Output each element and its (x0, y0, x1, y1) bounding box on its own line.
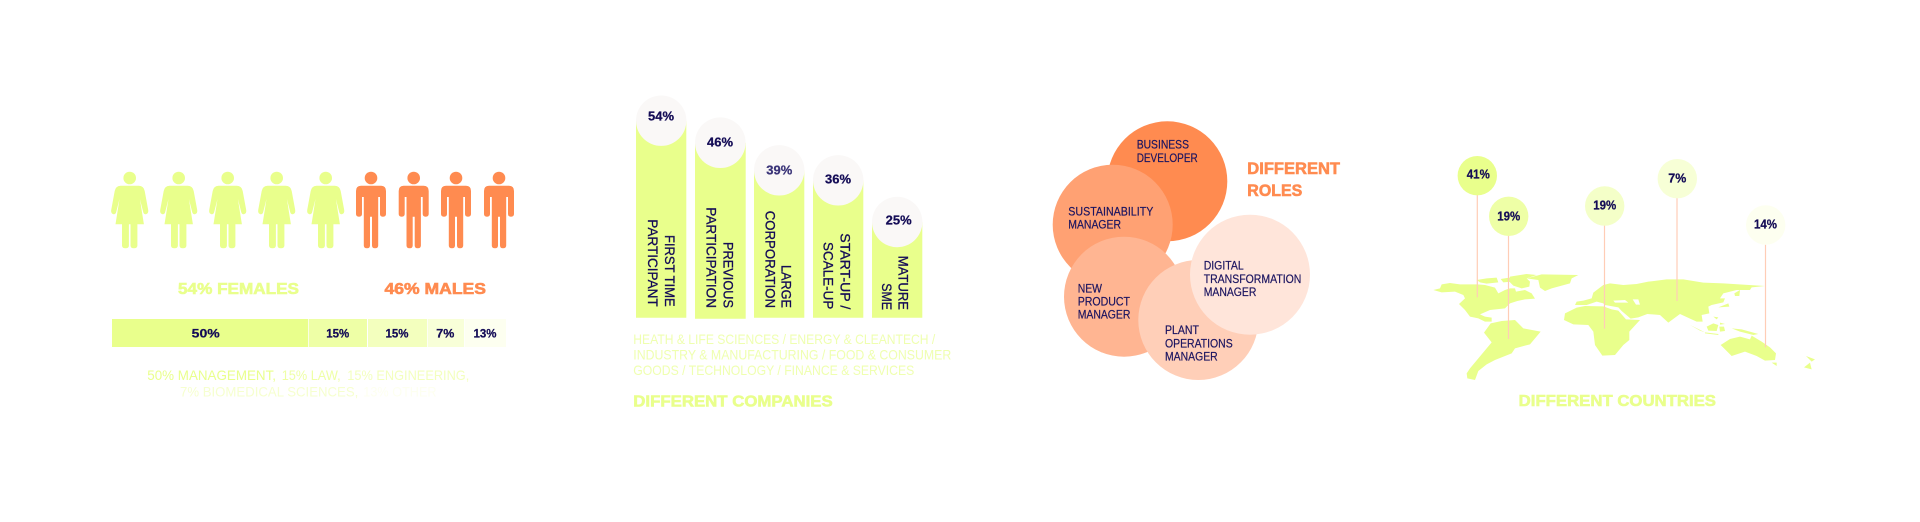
circle: business developer: BUSINESS (1137, 140, 1189, 152)
bar: first time participant: 54% (648, 110, 674, 124)
bar: first time participant (636, 96, 686, 318)
circle: business developer: DEVELOPER (1137, 153, 1198, 165)
pin: 19%: 19% (1497, 209, 1520, 223)
heading: different roles: DIFFERENT (1247, 159, 1341, 178)
bar: start-up / scale-up: START-UP / (838, 233, 854, 309)
caption: disciplines (147, 367, 469, 400)
caption: disciplines: 15% LAW, (282, 367, 341, 383)
panel: demographics (111, 172, 514, 400)
circle: digital transformation manager: DIGITAL (1204, 261, 1244, 273)
bar: start-up / scale-up (813, 155, 863, 318)
text block: sectors: INDUSTRY & MANUFACTURING / FOOD & CONSUMER (633, 346, 951, 362)
bar: mature SME: MATURE (896, 256, 912, 310)
pin: 19%: 19% (1593, 198, 1616, 212)
pin lines (1477, 195, 1766, 347)
heading: different companies: DIFFERENT COMPANIES (633, 394, 833, 411)
stacked bar: backgrounds (112, 319, 506, 347)
bar: start-up / scale-up: 36% (825, 172, 851, 186)
stacked bar: backgrounds: 50% (192, 327, 220, 341)
panel: roles (1053, 121, 1341, 380)
circle: new product manager (1064, 237, 1184, 357)
pin: 14%: 14% (1754, 218, 1777, 232)
pin: 41% (1458, 156, 1497, 195)
circle: digital transformation manager (1190, 215, 1310, 335)
pin: 7%: 7% (1668, 171, 1686, 185)
caption: disciplines: 15% ENGINEERING, (347, 367, 469, 383)
heading: different roles (1247, 159, 1341, 200)
circle: new product manager: NEW (1078, 283, 1102, 295)
bar: large corporation: LARGE (779, 265, 795, 308)
bar: previous participation: PREVIOUS (721, 242, 737, 308)
pin: 19% (1489, 197, 1528, 236)
heading: different roles: ROLES (1247, 181, 1302, 200)
text block: sectors (633, 331, 951, 378)
panel: countries (1433, 156, 1815, 410)
circle: plant operations manager: MANAGER (1165, 352, 1218, 364)
circle: digital transformation manager: TRANSFORMATION (1204, 274, 1301, 286)
bar: previous participation: 46% (707, 136, 733, 150)
bar: large corporation: CORPORATION (762, 211, 778, 308)
caption: disciplines: 13% OTHER (363, 384, 437, 400)
stacked bar: backgrounds: 13% (474, 327, 497, 341)
circle: new product manager: MANAGER (1078, 310, 1130, 322)
world map (1433, 274, 1815, 380)
pin: 41%: 41% (1467, 167, 1490, 181)
bar: first time participant: PARTICIPANT (645, 219, 661, 307)
circle: plant operations manager: OPERATIONS (1165, 338, 1233, 350)
caption: disciplines: 50% MANAGEMENT, (147, 367, 276, 383)
heading: different countries: DIFFERENT COUNTRIES (1519, 393, 1716, 410)
pin: 7% (1658, 159, 1697, 198)
circle: plant operations manager: PLANT (1165, 325, 1199, 337)
circle: new product manager: PRODUCT (1078, 296, 1130, 308)
bar: large corporation (754, 145, 804, 318)
circle: business developer (1107, 121, 1227, 241)
text block: sectors: HEATH & LIFE SCIENCES / ENERGY & CLEANTECH / (633, 331, 935, 347)
circle: plant operations manager (1138, 260, 1258, 380)
bar: mature SME (872, 197, 922, 318)
bar: start-up / scale-up: SCALE-UP (820, 242, 836, 309)
bar: mature SME: SME (879, 283, 895, 310)
label: males share: 46% MALES (384, 281, 486, 298)
circle: sustainability manager: MANAGER (1068, 220, 1121, 232)
label: females share: 54% FEMALES (178, 281, 299, 298)
text block: sectors: GOODS / TECHNOLOGY / FINANCE & SERVICES (633, 362, 914, 378)
stacked bar: backgrounds: 7% (436, 327, 455, 341)
bar: previous participation (695, 117, 746, 319)
stacked bar: backgrounds: 15% (326, 327, 350, 341)
panel: companies (633, 96, 951, 411)
circle: sustainability manager: SUSTAINABILITY (1068, 206, 1154, 218)
circle: sustainability manager (1053, 165, 1173, 285)
icons: females (111, 172, 344, 248)
icons: males (356, 172, 514, 248)
circle: digital transformation manager: MANAGER (1204, 287, 1256, 299)
caption: disciplines: 7% BIOMEDICAL SCIENCES, (180, 384, 358, 400)
bar: first time participant: FIRST TIME (662, 235, 678, 307)
pin: 14% (1746, 205, 1785, 245)
stacked bar: backgrounds: 15% (386, 327, 409, 341)
pin: 19% (1585, 186, 1624, 226)
bar: previous participation: PARTICIPATION (703, 207, 719, 308)
bar: large corporation: 39% (766, 164, 792, 178)
bar: mature SME: 25% (886, 214, 912, 228)
